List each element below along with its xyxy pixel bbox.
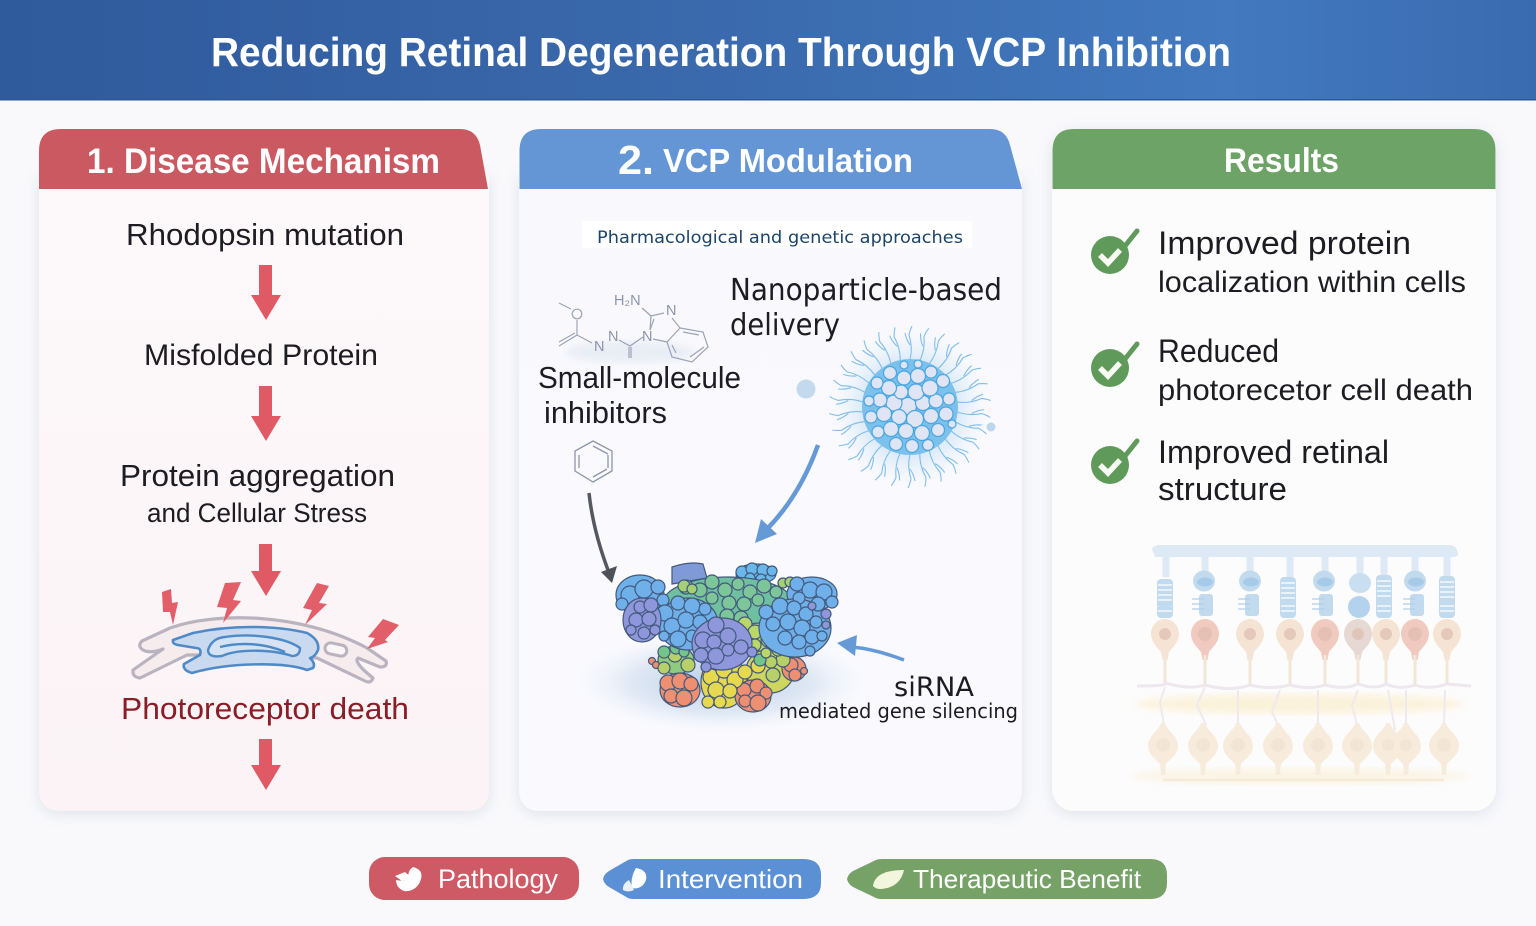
arrow: inhibitor to VCP <box>589 493 617 583</box>
panel header: disease mechanism <box>39 129 488 189</box>
protein: green upper ring <box>663 575 795 634</box>
result item 3 <box>1091 434 1389 507</box>
subtitle: approaches: Pharmacological and genetic approaches <box>597 228 963 248</box>
arrow: down 3 <box>251 544 281 596</box>
icon: small molecule structure: N <box>642 329 652 345</box>
protein: top tabs <box>672 563 777 584</box>
panel header: VCP modulation <box>520 129 1022 189</box>
label: small-molecule inhibitors: inhibitors <box>544 395 667 430</box>
protein: yellow-green wedge <box>734 617 784 658</box>
icon: pathology <box>395 867 421 891</box>
label: siRNA: mediated gene silencing <box>779 699 1018 723</box>
rods and cones <box>1157 570 1455 618</box>
legend <box>369 857 1167 900</box>
icon: check 1 <box>1091 231 1137 274</box>
result item 1: Improved protein <box>1158 225 1411 261</box>
panel header: VCP modulation: 2. <box>618 137 654 183</box>
result item 2: photorecetor cell death <box>1158 374 1473 407</box>
step: protein aggregation: Protein aggregation <box>120 458 395 493</box>
result item 2 <box>1091 333 1473 407</box>
panel: disease mechanism <box>39 129 489 811</box>
legend: therapeutic benefit <box>847 859 1167 899</box>
header banner <box>0 0 1536 100</box>
label: nanoparticle delivery <box>730 273 1002 343</box>
arrow: down 2 <box>251 386 281 441</box>
icon: small molecule structure: N <box>666 303 676 319</box>
step: photoreceptor death: Photoreceptor death <box>121 691 409 726</box>
panel: VCP modulation <box>519 129 1022 811</box>
legend: intervention <box>603 859 821 899</box>
icon: check 2 <box>1091 344 1137 387</box>
result item 1 <box>1091 225 1466 299</box>
outer segment bar <box>1152 545 1458 557</box>
label: small-molecule inhibitors <box>538 360 741 430</box>
icon: benzene ring <box>575 441 612 482</box>
protein: yellow and orange lower ring <box>648 642 808 712</box>
legend: therapeutic benefit: Therapeutic Benefit <box>913 864 1142 894</box>
label: siRNA: siRNA <box>894 672 975 703</box>
step: rhodopsin mutation: Rhodopsin mutation <box>126 217 404 252</box>
icon: intervention <box>623 868 646 892</box>
label: nanoparticle delivery: delivery <box>730 308 840 343</box>
icon: small molecule structure: H₂N <box>614 293 641 309</box>
illustration: retinal layers <box>1130 545 1471 784</box>
result item 3: Improved retinal <box>1158 434 1389 470</box>
legend: pathology <box>369 857 579 900</box>
arrow: down 1 <box>251 265 281 320</box>
panel header: results <box>1052 129 1496 189</box>
arrow: down 4 <box>251 739 281 790</box>
arrow: nanoparticle to VCP <box>755 445 818 543</box>
axons and synaptic layer <box>1165 655 1447 685</box>
step: cellular stress: and Cellular Stress <box>147 498 367 528</box>
label: small-molecule inhibitors: Small-molecule <box>538 360 741 395</box>
icon: check 3 <box>1091 441 1137 484</box>
arrow: siRNA to VCP <box>837 635 904 660</box>
panel header: disease mechanism: 1. Disease Mechanism <box>87 142 440 181</box>
step: misfolded protein: Misfolded Protein <box>144 339 378 372</box>
icon: small molecule structure: N <box>608 329 618 345</box>
panel: results <box>1052 129 1496 811</box>
panel header: results: Results <box>1224 142 1339 180</box>
icon: leaf <box>873 870 904 889</box>
subtitle: approaches <box>582 221 972 248</box>
title: Reducing Retinal Degeneration Through VCP Inhibition <box>211 29 1231 75</box>
legend: pathology: Pathology <box>438 864 558 894</box>
label: siRNA <box>779 672 1018 723</box>
protein: blue lobes <box>616 575 838 657</box>
photoreceptor cell bodies <box>1151 619 1461 660</box>
icon: small molecule structure: N <box>594 339 604 355</box>
result item 3: structure <box>1158 471 1287 507</box>
bipolar cells <box>1148 723 1459 775</box>
icon: VCP protein complex <box>616 563 838 712</box>
result item 2: Reduced <box>1158 333 1279 369</box>
icon: stressed photoreceptor membrane <box>133 582 399 682</box>
result item 1: localization within cells <box>1158 266 1466 299</box>
legend: intervention: Intervention <box>658 864 803 894</box>
label: nanoparticle delivery: Nanoparticle-based <box>730 273 1002 308</box>
protein: purple subunits <box>623 598 831 672</box>
panel header: VCP modulation: VCP Modulation <box>663 142 913 179</box>
shadow: VCP base <box>572 630 872 734</box>
icon: nanoparticle <box>796 326 996 488</box>
icon: small molecule structure <box>559 293 708 363</box>
